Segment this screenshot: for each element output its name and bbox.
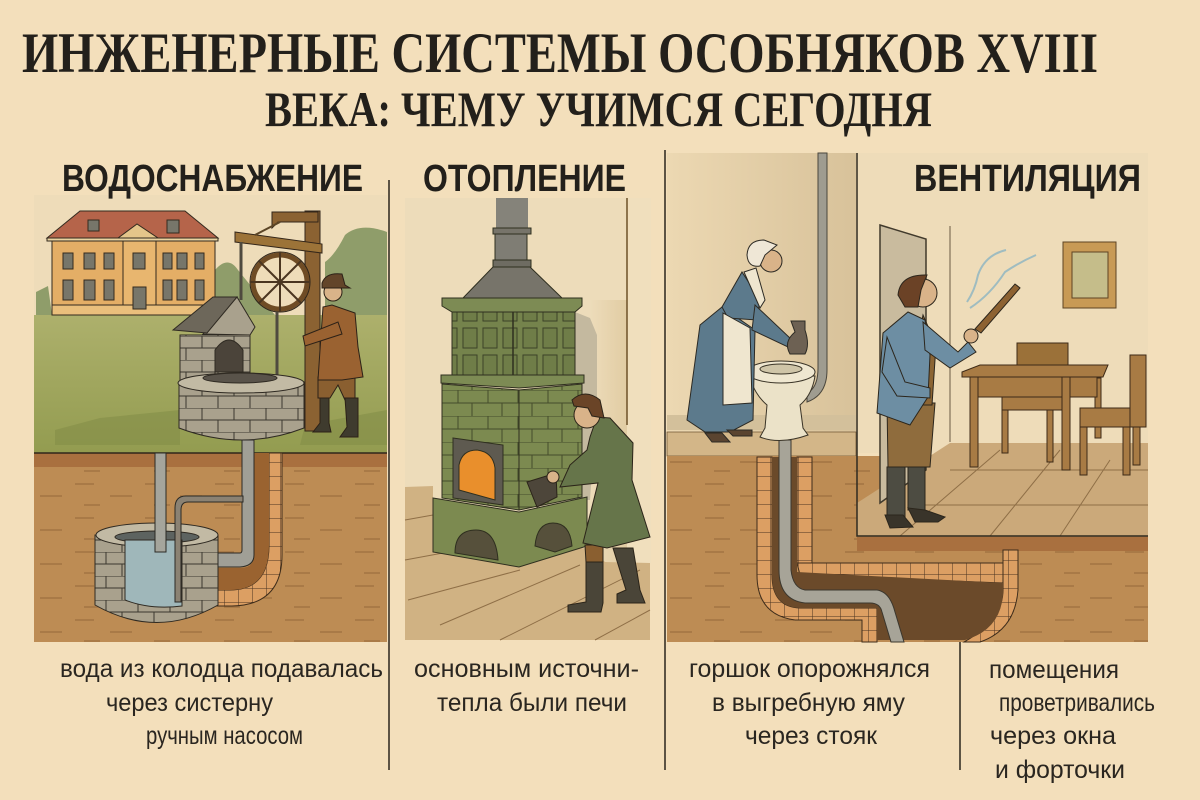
caption: ventilation: проветривались bbox=[999, 689, 1155, 717]
wooden floor bbox=[405, 486, 650, 640]
wheel and post bbox=[235, 211, 322, 431]
well house bbox=[173, 297, 255, 385]
caption: ventilation: помещения bbox=[989, 656, 1119, 684]
heating wall bbox=[405, 198, 627, 563]
title bbox=[22, 22, 1098, 137]
maid bbox=[687, 240, 808, 442]
drain stack bbox=[807, 153, 827, 402]
sewage wall bbox=[667, 153, 856, 433]
caption: heating bbox=[414, 655, 639, 717]
caption: heating: основным источни- bbox=[414, 655, 639, 683]
panel: sewage bbox=[667, 153, 1148, 642]
caption: sewage bbox=[689, 655, 930, 750]
brick channel bbox=[212, 453, 282, 606]
heading: water: ВОДОСНАБЖЕНИЕ bbox=[62, 158, 363, 200]
panel: ventilation bbox=[857, 153, 1148, 536]
right wall strip bbox=[627, 198, 651, 563]
door bbox=[880, 225, 926, 503]
manor house bbox=[47, 211, 218, 315]
caption: heating: тепла были печи bbox=[437, 689, 627, 717]
title: ВЕКА: ЧЕМУ УЧИМСЯ СЕГОДНЯ bbox=[265, 81, 932, 137]
man with stick bbox=[877, 275, 1020, 528]
caption: water: ручным насосом bbox=[146, 722, 303, 750]
caption: ventilation: через окна bbox=[990, 722, 1116, 750]
cistern bbox=[95, 523, 218, 622]
dark fill inside channel bbox=[218, 453, 269, 590]
caption: water: через систерну bbox=[106, 689, 273, 717]
water panel background bbox=[34, 195, 387, 642]
shade by wall bbox=[590, 300, 627, 563]
soil bbox=[34, 453, 387, 642]
soil bbox=[667, 456, 1148, 642]
divider bbox=[959, 642, 961, 770]
ventilation wall bbox=[857, 153, 1148, 453]
stove shadow bbox=[570, 312, 597, 500]
stove fire bbox=[459, 450, 495, 500]
man at the stove bbox=[527, 394, 650, 612]
caption: ventilation: и форточки bbox=[995, 756, 1125, 784]
divider bbox=[664, 150, 666, 770]
caption: water: вода из колодца подавалась bbox=[60, 655, 383, 683]
vessel bbox=[787, 321, 808, 354]
caption: sewage: горшок опорожнялся bbox=[689, 655, 930, 683]
stone well bbox=[178, 373, 304, 440]
caption: water bbox=[60, 655, 383, 750]
waste pipe bbox=[779, 440, 904, 642]
panel: water supply bbox=[34, 195, 387, 642]
panel: heating bbox=[405, 198, 651, 640]
framed picture bbox=[1063, 242, 1116, 308]
baseboard bbox=[667, 415, 856, 430]
divider bbox=[388, 180, 390, 770]
stove arches bbox=[455, 523, 572, 560]
firebox bbox=[453, 438, 503, 505]
tree backdrop bbox=[36, 228, 387, 315]
supply pipes bbox=[155, 440, 254, 602]
toilet bbox=[747, 361, 815, 441]
tile stove bbox=[433, 198, 587, 567]
caption: ventilation bbox=[989, 656, 1155, 784]
grass bbox=[34, 315, 387, 453]
air swirls bbox=[967, 250, 1036, 308]
table and chairs bbox=[962, 343, 1146, 475]
cesspit bbox=[772, 457, 1003, 640]
man at the wheel bbox=[303, 274, 363, 437]
wood floor bbox=[667, 432, 856, 456]
heading: heating: ОТОПЛЕНИЕ bbox=[423, 158, 626, 200]
heading: ventilation: ВЕНТИЛЯЦИЯ bbox=[914, 158, 1141, 200]
caption: sewage: в выгребную яму bbox=[712, 689, 905, 717]
brick shaft bbox=[757, 457, 1018, 642]
vent floor bbox=[857, 443, 1148, 536]
caption: sewage: через стояк bbox=[745, 722, 878, 750]
wall corner bbox=[949, 226, 951, 442]
